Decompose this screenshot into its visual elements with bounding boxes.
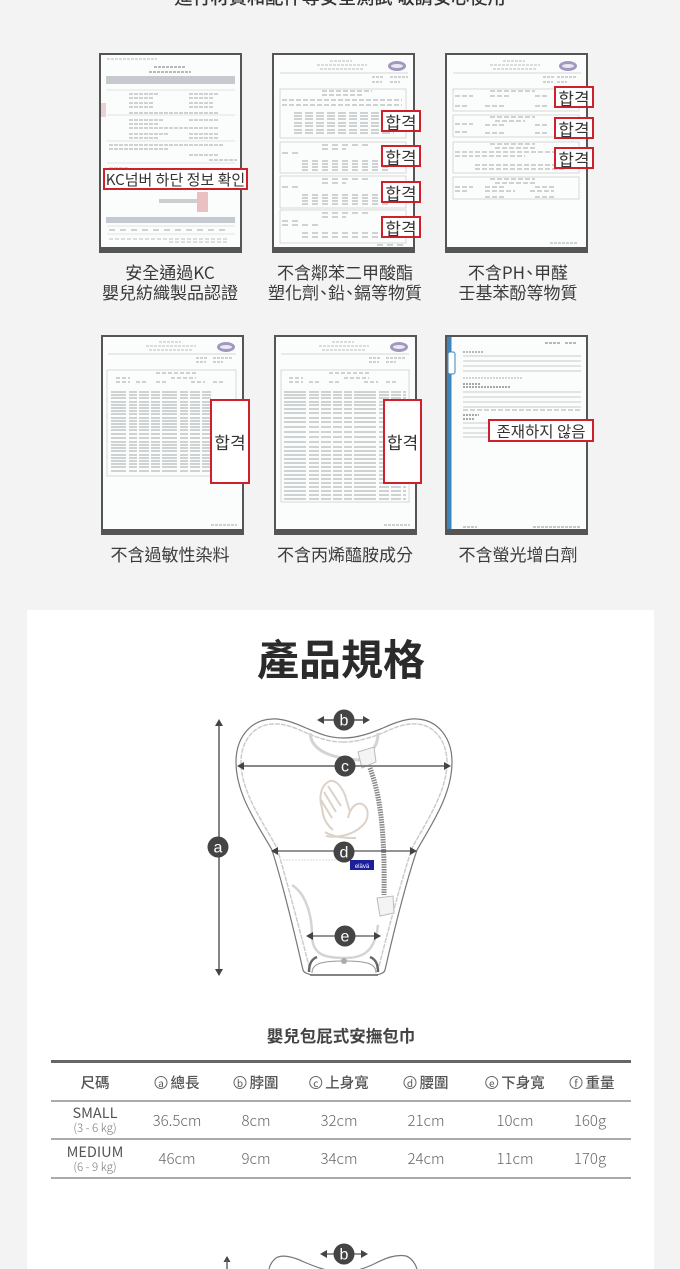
size table: e [489,1075,495,1090]
diagram: swaddle measurements [208,710,453,976]
caption: PH formaldehyde: 不含PH、甲醛 [468,259,568,284]
size table: 11cm [496,1148,534,1169]
caption: acrylamide: 不含丙烯醯胺成分 [277,541,413,566]
certificate: KC [99,53,242,253]
size table: SMALL [73,1102,117,1123]
caption: phthalates [268,259,422,304]
size table: 170g [574,1148,606,1169]
size table: d [407,1075,413,1090]
size table: 10cm [496,1110,534,1131]
callout: pass 7: 합격 [558,146,590,170]
certificate: allergenic dyes [101,335,244,535]
size table: 36.5cm [153,1110,201,1131]
size table: 尺碼 [80,1072,110,1093]
garment outline [236,719,452,975]
size table: 總長 [170,1072,200,1093]
callout: does not exist: 존재하지 않음 [496,420,586,442]
size table: (3 - 6 kg) [73,1120,117,1136]
arrow: a total length [208,719,228,976]
size table: 21cm [407,1110,445,1131]
size table: 8cm [241,1110,271,1131]
arrow: b neck [317,710,370,730]
caption: optical brightener: 不含螢光增白劑 [458,541,578,566]
size table: a [158,1075,164,1090]
callout: pass 3: 합격 [385,180,417,204]
size table: 腰圍 [420,1072,448,1093]
size table: f [574,1075,578,1090]
second diagram: medium size: b [340,1246,349,1264]
size table: 34cm [320,1148,358,1169]
size table: 32cm [320,1110,358,1131]
callout: pass 9: 합격 [387,429,418,454]
size table: (6 - 9 kg) [73,1159,117,1175]
arrow: e lower width: e [341,928,350,946]
size table: MEDIUM [67,1141,123,1162]
callout: pass 8 [210,399,250,484]
product name: 嬰兒包屁式安撫包巾 [267,1023,415,1047]
arrow: d waist: d [340,844,348,862]
arrow: d waist [271,842,417,862]
caption: allergenic dyes: 不含過敏性染料 [110,541,230,566]
arrow: e lower width [306,926,381,946]
arrow: c chest width [237,756,451,776]
zipper [358,747,394,916]
callout: pass 9 [383,399,422,484]
callout: pass 5: 합격 [558,84,590,110]
arrow: c chest width: c [341,758,349,776]
size table: 24cm [407,1148,445,1169]
callout: pass 2: 합격 [385,144,417,168]
size table: 下身寬 [501,1072,545,1093]
caption: KC [102,259,238,304]
label: brand tag: elävä [355,864,370,870]
size table: b [237,1075,243,1090]
size table: 46cm [158,1148,196,1169]
size table: 9cm [241,1148,271,1169]
callout: pass 4: 합격 [385,214,417,240]
callout: KC number: KC넘버 하단 정보 확인 [106,168,245,190]
heading: product specification: 產品規格 [257,627,425,688]
certificate: phthalates [272,53,415,253]
callout: pass 8: 합격 [214,429,246,454]
certificate: optical brightener [445,335,588,535]
caption: PH formaldehyde: 壬基苯酚等物質 [458,278,578,304]
caption: KC: 嬰兒紡織製品認證 [102,278,238,304]
size table: 脖圍 [250,1072,278,1093]
arrow: a total length: a [214,840,223,856]
label: brand tag [350,860,374,870]
size table: 重量 [586,1072,614,1093]
second diagram: medium size [224,1244,418,1269]
certificate: acrylamide [274,335,417,535]
caption: phthalates: 塑化劑、鉛、鎘等物質 [268,278,422,304]
size table: 上身寬 [325,1072,369,1093]
size table: c [313,1075,318,1090]
caption: KC: 安全通過KC [125,259,215,284]
caption: PH formaldehyde [458,259,578,304]
logo: hand mark [320,781,368,838]
arrow: b neck: b [340,712,349,730]
size table: 160g [574,1110,606,1131]
certificate: PH formaldehyde [445,53,588,253]
panel: product specification [27,610,654,1269]
caption: phthalates: 不含鄰苯二甲酸酯 [277,259,413,284]
callout: pass 1: 합격 [385,108,417,134]
callout: pass 6: 합격 [558,116,590,140]
